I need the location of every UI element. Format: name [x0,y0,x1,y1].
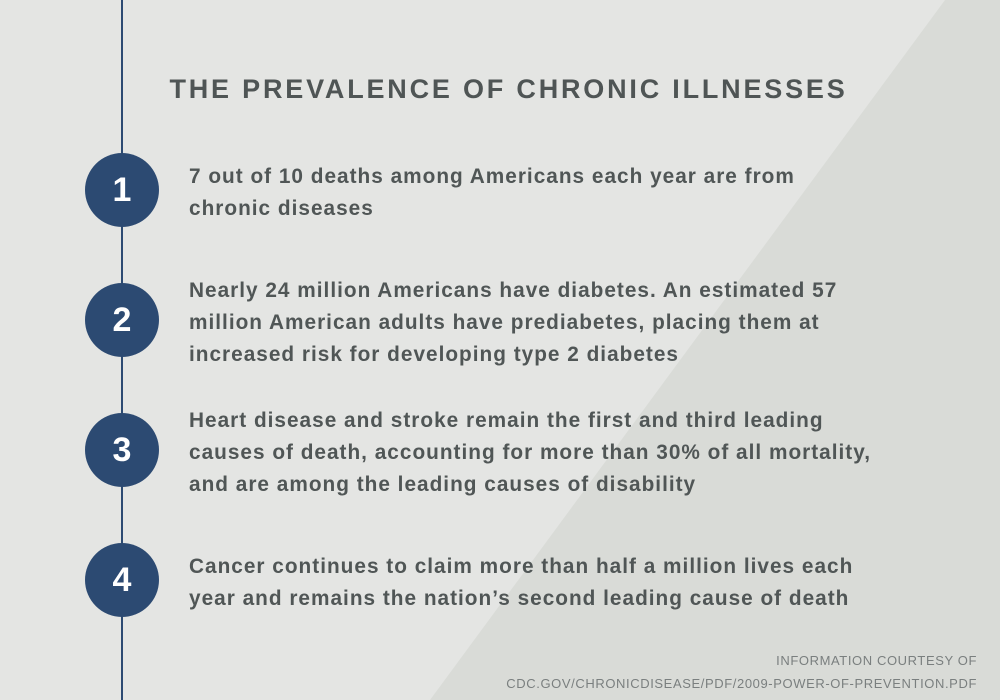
text 3: causes of death, accounting for more than 30% of all mortality, [189,441,871,464]
circle 4 [85,543,159,617]
circle 3 [85,413,159,487]
circle 2 [85,283,159,357]
text 4 [189,555,853,610]
circle 1: 1 [113,171,131,209]
text 1 [189,165,795,220]
text 2: increased risk for developing type 2 diabetes [189,343,679,366]
footer source [506,653,977,691]
text 1: chronic diseases [189,197,374,220]
circle 4: 4 [113,561,131,599]
text 3: and are among the leading causes of disability [189,473,696,496]
text 3 [189,409,871,496]
text 1: 7 out of 10 deaths among Americans each year are from [189,165,795,188]
footer source: CDC.GOV/CHRONICDISEASE/PDF/2009-POWER-OF-PREVENTION.PDF [506,676,977,691]
text 4: Cancer continues to claim more than half a million lives each [189,555,853,578]
circle 1 [85,153,159,227]
circle 2: 2 [113,301,131,339]
footer source: INFORMATION COURTESY OF [776,653,977,668]
text 2 [189,279,837,366]
text 4: year and remains the nation’s second leading cause of death [189,587,849,610]
title: THE PREVALENCE OF CHRONIC ILLNESSES [169,74,848,104]
text 2: million American adults have prediabetes, placing them at [189,311,820,334]
circle 3: 3 [113,431,131,469]
text 2: Nearly 24 million Americans have diabetes. An estimated 57 [189,279,837,302]
text 3: Heart disease and stroke remain the first and third leading [189,409,824,432]
